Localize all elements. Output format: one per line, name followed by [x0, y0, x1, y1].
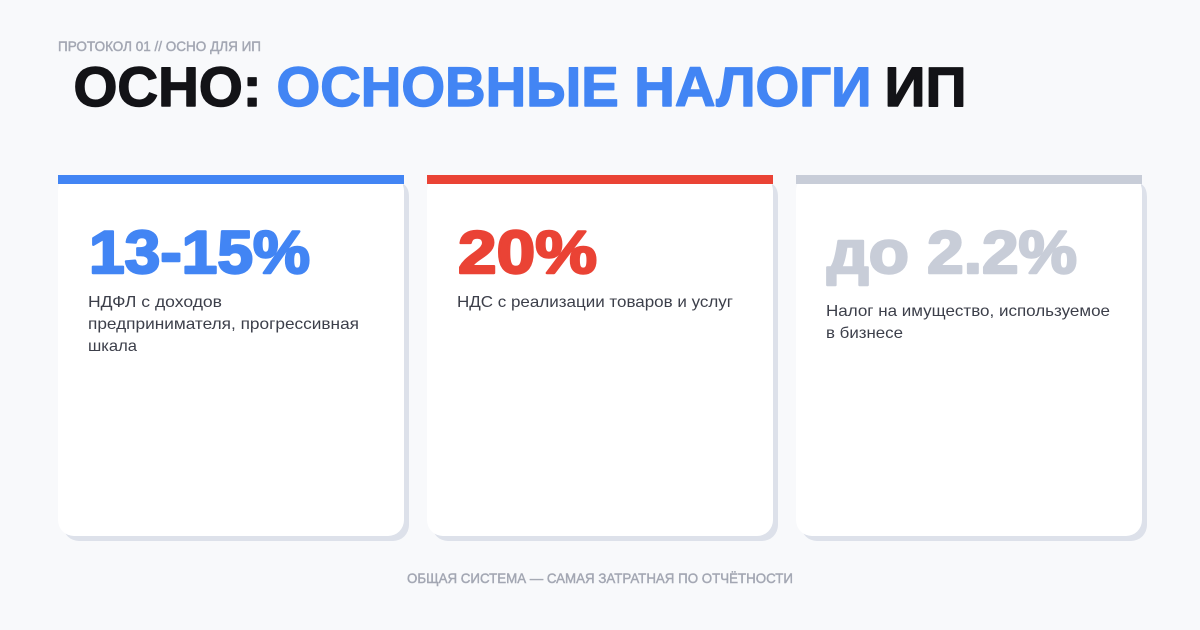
- accent bar: [796, 175, 1142, 184]
- rate value: 20%: [458, 219, 597, 286]
- card shadow and body: [58, 175, 409, 541]
- description: [88, 294, 359, 355]
- description: [826, 303, 1110, 342]
- card shadow and body: [427, 175, 778, 541]
- rate value: 13-15%: [89, 219, 310, 286]
- rate value: до 2.2%: [827, 219, 1077, 286]
- description: НДС с реализации товаров и услуг: [457, 294, 733, 311]
- panel: НДС: [427, 175, 778, 541]
- accent bar: [58, 175, 404, 184]
- description: НДФЛ с доходов: [88, 294, 222, 311]
- footer note: ОБЩАЯ СИСТЕМА — САМАЯ ЗАТРАТНАЯ ПО ОТЧЁТНОСТИ: [407, 570, 793, 586]
- card shadow and body: [796, 175, 1147, 541]
- title: [74, 55, 966, 118]
- description: предпринимателя, прогрессивная: [88, 316, 359, 333]
- description: в бизнесе: [826, 325, 903, 342]
- title: ОСНО:: [74, 55, 262, 118]
- title: ИП: [884, 55, 966, 118]
- title: ОСНОВНЫЕ НАЛОГИ: [276, 55, 872, 118]
- description: Налог на имущество, используемое: [826, 303, 1110, 320]
- description: шкала: [88, 338, 137, 355]
- eyebrow label: ПРОТОКОЛ 01 // ОСНО ДЛЯ ИП: [58, 38, 261, 54]
- panel: НДФЛ: [58, 175, 409, 541]
- accent bar: [427, 175, 773, 184]
- panel: налог на имущество: [796, 175, 1147, 541]
